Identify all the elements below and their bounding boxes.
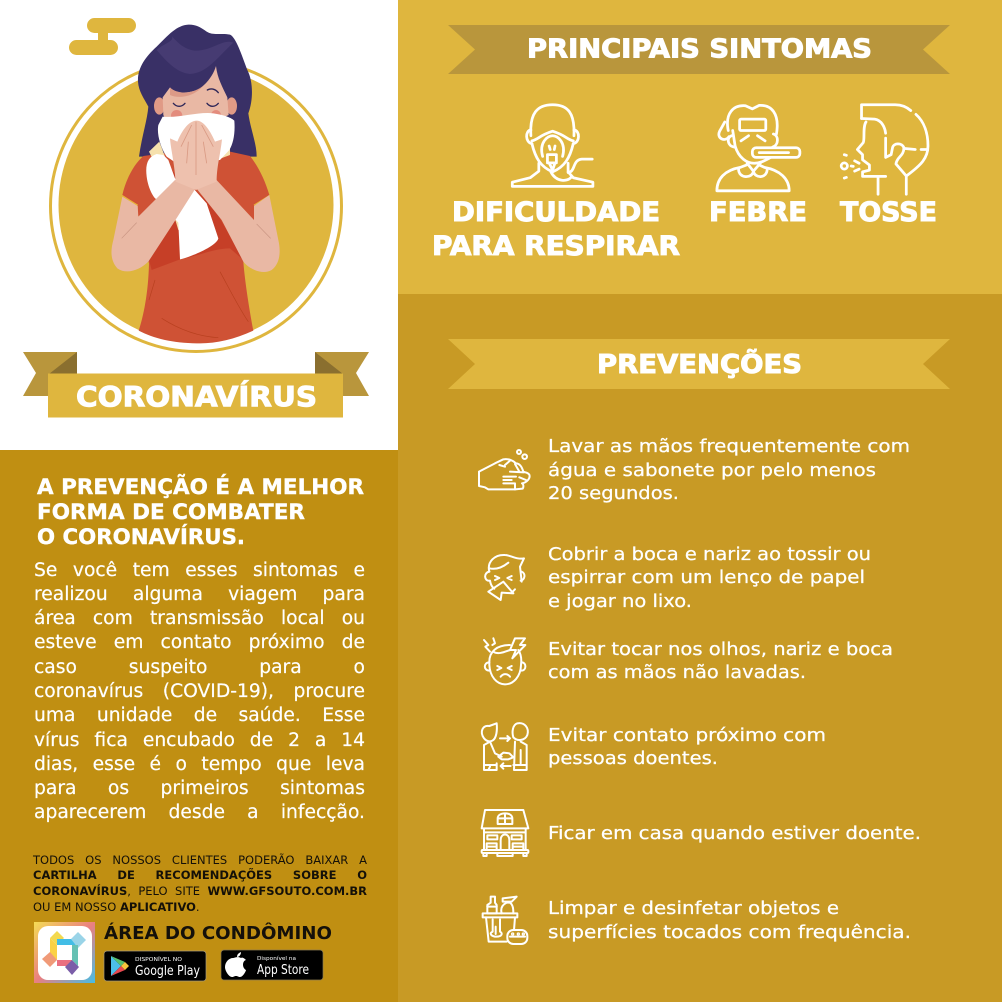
text: download note bbox=[32, 852, 367, 914]
text: prevention paragraph: área com transmissão local ou bbox=[34, 608, 365, 629]
text: cover mouth bbox=[548, 544, 871, 612]
dress shadow bbox=[149, 157, 243, 270]
text: app name: ÁREA DO CONDÔMINO bbox=[104, 922, 332, 944]
illustration: woman sneezing into tissue bbox=[111, 25, 280, 343]
banner title: CORONAVÍRUS bbox=[76, 379, 317, 413]
heading: prevention message: FORMA DE COMBATER bbox=[37, 500, 305, 524]
text: clean surfaces: Limpar e desinfetar objetos e bbox=[548, 898, 839, 919]
panel: preventions background bbox=[398, 294, 1002, 1002]
label: dificuldade para respirar: PARA RESPIRAR bbox=[432, 231, 680, 262]
heading: symptoms banner: PRINCIPAIS SINTOMAS bbox=[527, 34, 872, 64]
text: prevention paragraph: aparecerem desde a infecção. bbox=[34, 802, 365, 823]
text: wash hands: água e sabonete por pelo menos bbox=[548, 460, 876, 481]
tissue bbox=[158, 113, 235, 163]
heading: prevention message bbox=[37, 474, 364, 549]
text: avoid contact: pessoas doentes. bbox=[548, 748, 718, 769]
text: avoid contact bbox=[548, 725, 826, 769]
text: download note: CARTILHA DE RECOMENDAÇÕES SOBRE O bbox=[33, 868, 367, 882]
icon: headache bbox=[484, 638, 525, 684]
label: febre: FEBRE bbox=[709, 197, 807, 228]
text: avoid touching face bbox=[548, 639, 893, 683]
label: tosse: TOSSE bbox=[840, 197, 937, 228]
heading: prevention message: O CORONAVÍRUS. bbox=[37, 524, 245, 549]
text: cover mouth: e jogar no lixo. bbox=[548, 591, 692, 612]
text: prevention paragraph: uma unidade de saúde. Esse bbox=[34, 705, 365, 726]
text: prevention paragraph: realizou alguma viagem para bbox=[34, 584, 365, 605]
text: avoid touching face: Evitar tocar nos olhos, nariz e boca bbox=[548, 639, 893, 660]
banner: coronavirus ribbon bbox=[23, 352, 369, 418]
text: wash hands: Lavar as mãos frequentemente com bbox=[548, 436, 910, 457]
label: dificuldade para respirar bbox=[432, 197, 680, 262]
panel: illustration background bbox=[0, 0, 398, 450]
text: cover mouth: Cobrir a boca e nariz ao tossir ou bbox=[548, 544, 871, 565]
text: clean surfaces: superfícies tocados com frequência. bbox=[548, 922, 911, 943]
text: download note: TODOS OS NOSSOS CLIENTES PODERÃO BAIXAR A bbox=[33, 852, 367, 866]
text: prevention paragraph: caso suspeito para o bbox=[34, 657, 365, 678]
icon: cough bbox=[841, 105, 928, 194]
badge: app store: App Store bbox=[257, 963, 309, 978]
text: prevention paragraph: vírus fica encubado de 2 a 14 bbox=[34, 730, 365, 751]
text: wash hands bbox=[548, 436, 910, 504]
sleeve stripes bbox=[122, 196, 269, 205]
hair highlight bbox=[157, 36, 233, 74]
text: prevention paragraph: coronavírus (COVID-19), procure bbox=[34, 681, 365, 702]
scarf bbox=[149, 142, 165, 162]
illustration: circle backdrop bbox=[50, 60, 342, 352]
eyes and brow bbox=[173, 89, 218, 106]
arms bbox=[111, 180, 197, 271]
text: prevention paragraph: dias, esse é o tempo que leva bbox=[34, 754, 365, 775]
text: wash hands: 20 segundos. bbox=[548, 483, 679, 504]
ears bbox=[154, 97, 165, 115]
heading: prevention message: A PREVENÇÃO É A MELHOR bbox=[37, 474, 364, 499]
hair bbox=[138, 25, 257, 157]
icon: house bbox=[482, 810, 528, 856]
label: dificuldade para respirar: DIFICULDADE bbox=[452, 197, 660, 228]
icon: covering sneeze bbox=[485, 555, 524, 600]
heading: preventions banner bbox=[448, 339, 950, 389]
icon: cleaning supplies bbox=[483, 897, 527, 944]
badge: app store: Disponível na bbox=[257, 955, 296, 962]
icon: cloud bbox=[69, 18, 136, 55]
icon: two people bbox=[482, 723, 528, 770]
heading: preventions banner: PREVENÇÕES bbox=[597, 348, 802, 380]
heading: symptoms banner bbox=[448, 25, 950, 74]
text: clean surfaces bbox=[548, 898, 911, 943]
icon: oxygen mask bbox=[512, 105, 593, 186]
icon: washing hands bbox=[479, 450, 530, 489]
badge: google play bbox=[104, 951, 206, 981]
panel: symptoms background bbox=[398, 0, 1002, 294]
text: download note: OU EM NOSSO APLICATIVO. bbox=[33, 900, 200, 914]
panel: prevention message background bbox=[0, 450, 398, 1002]
text: cover mouth: espirrar com um lenço de papel bbox=[548, 567, 865, 588]
badge: google play: Google Play bbox=[135, 964, 200, 979]
text: stay home: Ficar em casa quando estiver doente. bbox=[548, 823, 921, 844]
face bbox=[163, 66, 229, 122]
text: prevention paragraph: para os primeiros sintomas bbox=[34, 778, 365, 799]
icon: fever bbox=[717, 105, 800, 191]
text: prevention paragraph bbox=[34, 560, 365, 823]
text: avoid contact: Evitar contato próximo com bbox=[548, 725, 826, 746]
text: download note: CORONAVÍRUS, PELO SITE WWW.GFSOUTO.COM.BR bbox=[33, 884, 367, 898]
cheeks bbox=[171, 110, 182, 121]
badge: google play: DISPONÍVEL NO bbox=[135, 956, 183, 963]
icon: app logo bbox=[34, 922, 95, 983]
text: avoid touching face: com as mãos não lavadas. bbox=[548, 662, 806, 683]
hands bbox=[170, 121, 222, 190]
text: prevention paragraph: esteve em contato próximo de bbox=[34, 632, 365, 653]
text: prevention paragraph: Se você tem esses sintomas e bbox=[34, 560, 365, 580]
dress bbox=[122, 152, 269, 343]
badge: app store bbox=[221, 950, 323, 980]
